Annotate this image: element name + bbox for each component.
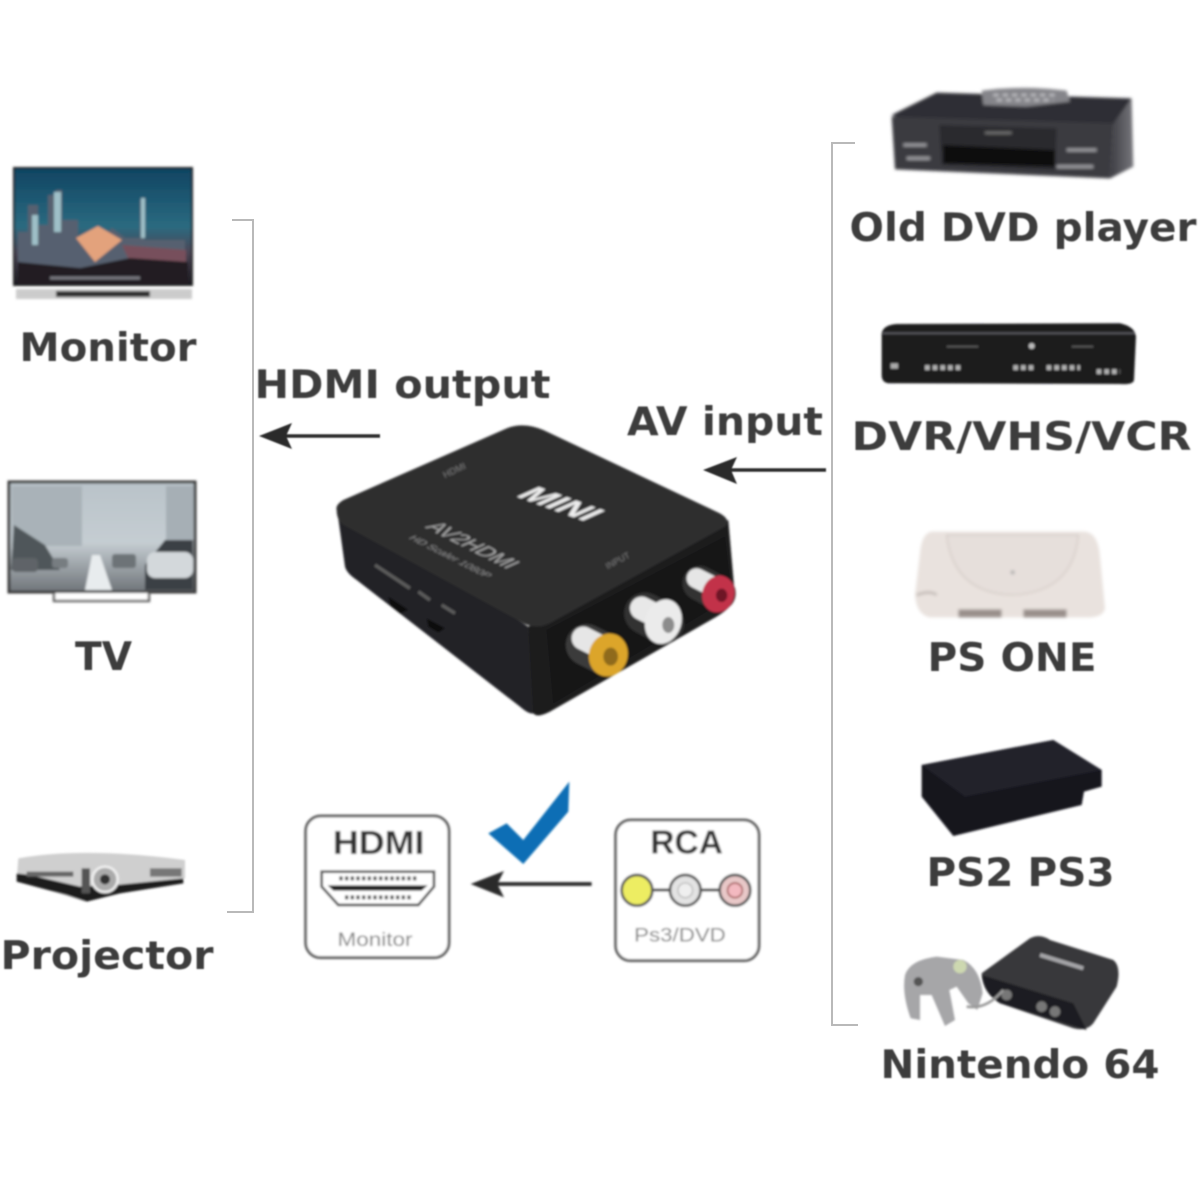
bracket: output devices bbox=[227, 220, 253, 912]
Ps3/DVD caption: Ps3/DVD bbox=[634, 925, 726, 946]
RCA heading: RCA bbox=[650, 824, 723, 861]
icon: PS2 console bbox=[922, 740, 1102, 836]
adapter RCA yellow bbox=[583, 628, 633, 682]
icon: old DVD player bbox=[892, 88, 1133, 178]
icon: TV bbox=[9, 482, 195, 601]
Monitor caption: Monitor bbox=[337, 930, 413, 951]
label: PS2 PS3: PS2 PS3 bbox=[926, 851, 1114, 896]
adapter AV2HDMI print: AV2HDMI bbox=[420, 519, 526, 571]
label: Nintendo 64: Nintendo 64 bbox=[880, 1043, 1160, 1088]
label: Monitor: Monitor bbox=[20, 326, 197, 371]
icon: DVR/VHS/VCR bbox=[882, 323, 1136, 384]
icon: monitor bbox=[14, 168, 192, 299]
icon: Nintendo 64 bbox=[904, 936, 1119, 1030]
icon: HDMI port card bbox=[306, 816, 449, 958]
label: Old DVD player: Old DVD player bbox=[850, 206, 1197, 251]
HDMI heading: HDMI bbox=[333, 825, 424, 862]
adapter right face bbox=[528, 520, 735, 715]
adapter MINI logo: MINI bbox=[507, 483, 614, 525]
arrow: to output bbox=[259, 423, 380, 449]
adapter product: HD Scaler 1080P bbox=[405, 535, 495, 579]
adapter product bbox=[336, 425, 739, 715]
icon: RCA port card bbox=[616, 820, 759, 961]
label: PS ONE: PS ONE bbox=[928, 636, 1096, 681]
adapter product: INPUT bbox=[604, 550, 632, 571]
heading: AV input: AV input bbox=[627, 400, 823, 445]
icon: check mark bbox=[488, 782, 569, 864]
RCA connectors bbox=[622, 875, 750, 906]
bracket: input devices bbox=[832, 143, 858, 1025]
HDMI connector bbox=[322, 872, 434, 905]
icon: projector bbox=[17, 853, 185, 902]
label: Projector: Projector bbox=[0, 934, 214, 979]
icon: PS One bbox=[915, 532, 1105, 617]
adapter switches bbox=[388, 597, 408, 613]
label: DVR/VHS/VCR: DVR/VHS/VCR bbox=[852, 415, 1192, 460]
arrow: RCA to HDMI bbox=[471, 871, 592, 897]
label: TV: TV bbox=[75, 635, 132, 680]
adapter RCA red bbox=[697, 571, 739, 617]
adapter product: HDMI bbox=[442, 461, 467, 480]
heading: HDMI output: HDMI output bbox=[254, 363, 550, 408]
arrow: from input bbox=[703, 457, 826, 484]
adapter RCA white bbox=[639, 595, 687, 649]
adapter top face bbox=[336, 425, 727, 627]
adapter left face bbox=[337, 507, 537, 713]
